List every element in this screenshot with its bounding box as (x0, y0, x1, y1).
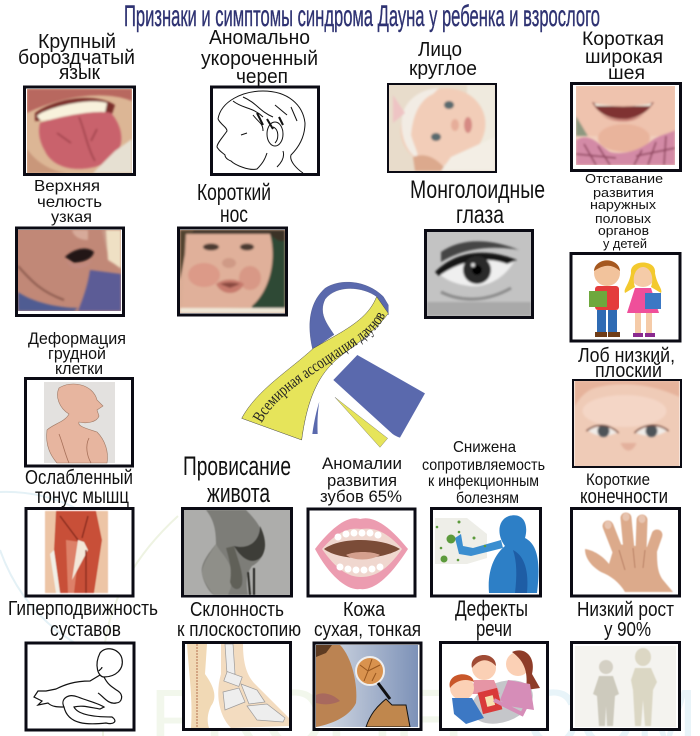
panel: narrow upper jaw (16, 178, 124, 316)
ribbon loop (310, 282, 388, 349)
caption: large furrowed tongue (18, 31, 135, 84)
caption: weakened muscle tone: тонус мышц (35, 485, 129, 508)
caption: dry thin skin: сухая, тонкая (314, 619, 421, 641)
caption: low flat forehead: плоский (595, 360, 662, 382)
photo: short-fingered hand (584, 512, 674, 593)
caption: short wide neck: Короткая (582, 29, 664, 50)
panel: reduced resistance to infections (422, 439, 545, 596)
caption: mongoloid eyes (410, 176, 545, 229)
caption: mongoloid eyes: Монголоидные (410, 176, 545, 204)
caption: short wide neck (582, 29, 664, 84)
icon: chest silhouette (44, 382, 115, 464)
caption: dry thin skin: Кожа (343, 599, 386, 621)
caption: short nose (197, 179, 271, 227)
photo: child's mouth and jaw (18, 230, 121, 311)
caption: dental anomalies 65%: Аномалии (322, 454, 402, 473)
caption: chest deformity: грудной (48, 344, 106, 363)
panel: chest deformity (26, 329, 132, 466)
caption: joint hypermobility: Гиперподвижность (8, 598, 158, 620)
caption: low flat forehead: Лоб низкий, (578, 345, 675, 367)
panel: weakened muscle tone (25, 467, 133, 596)
caption: delayed development: половых (595, 211, 652, 226)
photo: eye (427, 232, 531, 316)
panel: sagging belly (182, 451, 292, 596)
caption: reduced resistance to infectious diseases (422, 439, 545, 507)
caption: dental anomalies 65%: развития (327, 471, 397, 490)
caption: speech defects: речи (476, 616, 512, 641)
photo: arm muscles (44, 510, 108, 594)
caption: short limbs: Короткие (586, 470, 650, 489)
caption: sagging belly: Провисание (183, 451, 291, 481)
caption: short limbs: конечности (580, 486, 668, 508)
caption: dental anomalies 65% (320, 454, 402, 506)
caption: tendency to flat feet: Склонность (190, 599, 284, 621)
icon: cartoon children (589, 260, 662, 337)
caption: short stature in 90%: у 90% (604, 619, 651, 641)
caption: chest deformity (28, 329, 126, 378)
caption: narrow upper jaw (34, 178, 102, 226)
caption: chest deformity: клетки (55, 359, 103, 378)
caption: narrow upper jaw: челюсть (37, 194, 102, 211)
caption: reduced resistance to infectious diseases: к инфекционным (428, 473, 539, 490)
ribbon band with text (242, 297, 388, 440)
photo: child's profile with sagging belly (184, 510, 290, 595)
caption: speech defects: Дефекты (455, 596, 528, 621)
icon: open mouth with teeth (315, 518, 408, 590)
caption: reduced resistance to infectious diseases: сопротивляемость (422, 457, 545, 474)
caption: round face (409, 39, 477, 80)
icon: foot anatomy (187, 644, 289, 728)
caption: speech defects (455, 596, 528, 641)
caption: joint hypermobility (8, 598, 158, 641)
caption: dry thin skin (314, 599, 421, 641)
panel: short wide neck (572, 29, 680, 170)
photo: child's neck (576, 86, 675, 165)
ribbon: World Association of Down's (241, 282, 425, 448)
panel: low flat forehead (573, 345, 681, 467)
icon: skull line drawing (216, 90, 306, 173)
panel: short limbs (572, 470, 680, 596)
caption: large furrowed tongue: язык (59, 62, 100, 84)
caption: sagging belly (183, 451, 291, 508)
caption: weakened muscle tone (25, 467, 133, 508)
icon: speech therapist with children (450, 650, 540, 724)
ribbon tail: blue (333, 355, 425, 438)
photo: tongue (27, 89, 132, 173)
panel: tendency to flat feet (177, 599, 301, 730)
panel: mongoloid eyes (410, 176, 545, 318)
photo: round-faced baby (389, 85, 495, 171)
panel: delayed genital development in children (571, 171, 680, 341)
caption: weakened muscle tone: Ослабленный (25, 467, 133, 489)
caption: chest deformity: Деформация (28, 329, 126, 348)
icon: blue figure blocking germs (435, 515, 538, 593)
panel: speech defects (440, 596, 548, 732)
panel: large furrowed tongue (18, 31, 135, 174)
caption: sagging belly: живота (207, 478, 271, 508)
panel: dry thin skin (314, 599, 421, 730)
ribbon fragment: yellow (335, 397, 388, 447)
caption: delayed development: у детей (603, 236, 647, 251)
caption: short wide neck: шея (608, 63, 645, 84)
caption: delayed development: органов (598, 223, 649, 238)
watermark background (0, 492, 697, 736)
icon: face with magnifying glass on dry skin (316, 645, 418, 727)
caption: abnormally short skull: укороченный (201, 48, 318, 70)
caption: short nose: Короткий (197, 179, 271, 205)
caption: abnormally short skull: череп (236, 66, 288, 88)
panel: abnormally short skull (201, 27, 318, 174)
caption: large furrowed tongue: Крупный (38, 31, 116, 53)
caption: round face: круглое (409, 58, 477, 80)
panel: round face (388, 39, 496, 177)
panel: short stature 90% (572, 599, 680, 730)
caption: abnormally short skull (201, 27, 318, 88)
caption: reduced resistance to infectious diseases: Снижена (453, 439, 516, 456)
caption: dental anomalies 65%: зубов 65% (320, 487, 402, 506)
photo: baby's forehead (574, 381, 680, 466)
caption: abnormally short skull: Аномально (209, 27, 310, 49)
photo: two short figures (575, 646, 676, 727)
ribbon text: Всемирная ассоциация даунов (252, 312, 384, 423)
photo: child's short nose (180, 230, 285, 313)
caption: low flat forehead (578, 345, 675, 382)
caption: reduced resistance to infectious diseases: болезням (456, 490, 519, 507)
icon: baby outline (33, 648, 123, 724)
panel: short nose (178, 179, 286, 315)
caption: short stature in 90% (577, 599, 674, 641)
ribbon fragment: blue (312, 402, 319, 434)
caption: joint hypermobility: суставов (50, 619, 121, 641)
caption: mongoloid eyes: глаза (456, 201, 504, 229)
caption: short nose: нос (220, 201, 248, 227)
caption: short limbs (580, 470, 668, 508)
caption: large furrowed tongue: бороздчатый (18, 47, 135, 69)
caption: short stature in 90%: Низкий рост (577, 599, 674, 621)
caption: round face: Лицо (418, 39, 462, 61)
caption: delayed development (585, 171, 663, 251)
panel: joint hypermobility (8, 598, 158, 730)
caption: tendency to flat feet (177, 599, 301, 641)
caption: tendency to flat feet: к плоскостопию (177, 619, 301, 641)
caption: delayed development: наружных (590, 197, 657, 212)
caption: narrow upper jaw: Верхняя (34, 178, 100, 195)
caption: delayed development: Отставание (585, 171, 663, 186)
caption: delayed development: развития (593, 185, 654, 200)
panel: dental anomalies (308, 454, 415, 596)
caption: narrow upper jaw: узкая (51, 209, 92, 226)
caption: short wide neck: широкая (585, 47, 663, 68)
